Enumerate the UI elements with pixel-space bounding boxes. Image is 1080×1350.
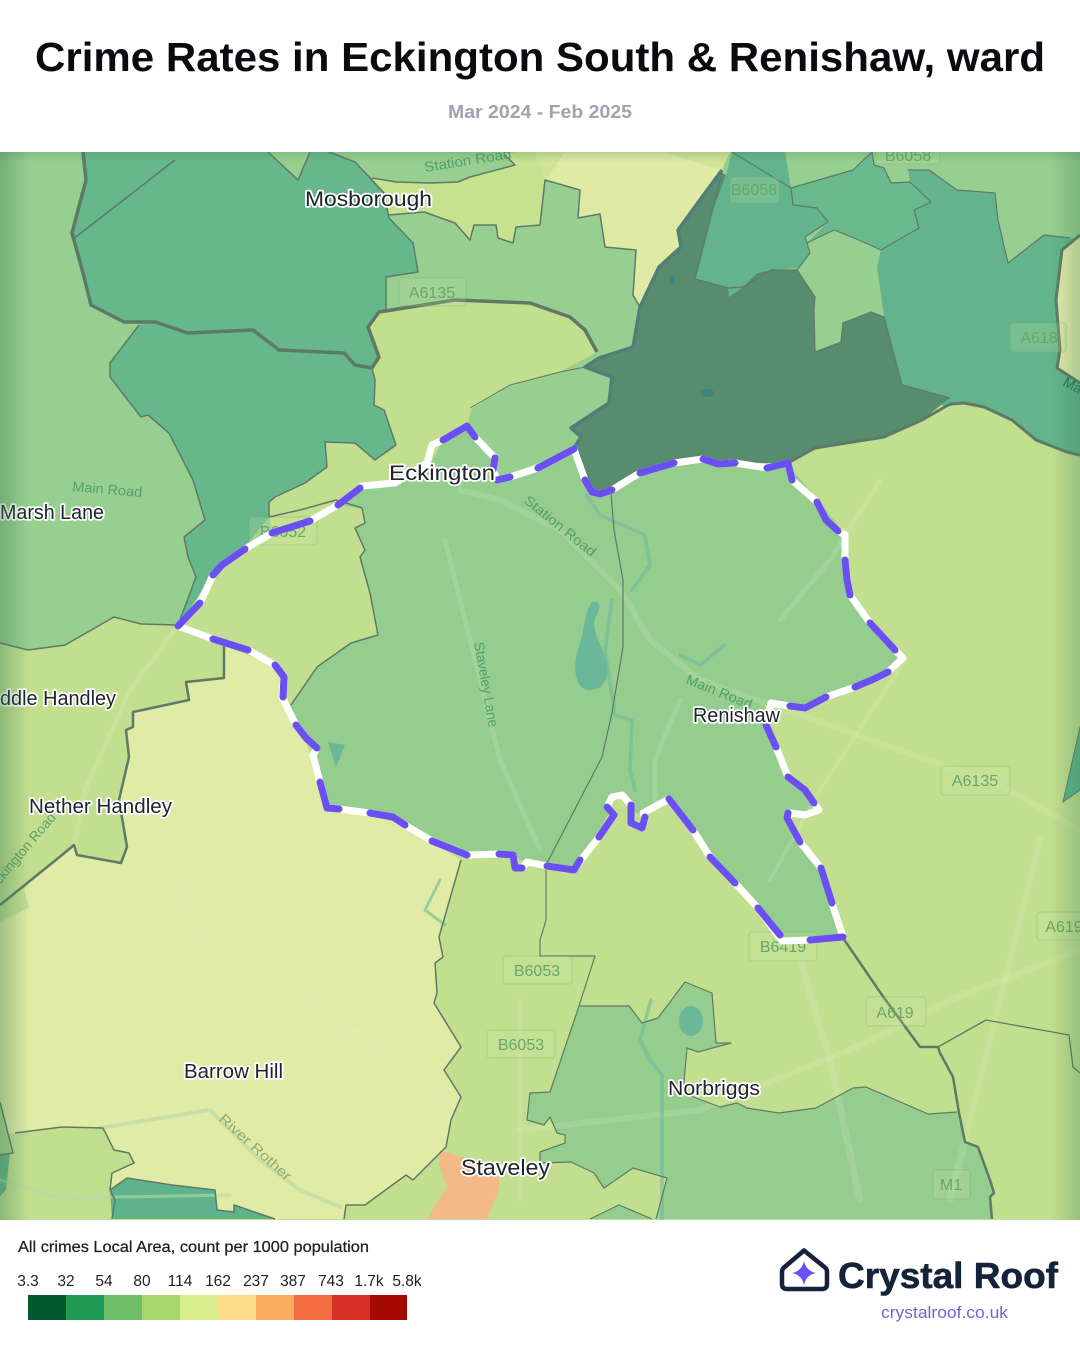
area: north pale yellow [545, 152, 722, 307]
road label: B6053 lower: B6053 [498, 1037, 544, 1054]
road name: Main Road west: Main Road [72, 478, 143, 500]
road label: B6058 top: B6058 [885, 148, 931, 165]
area: Norbriggs green [527, 982, 994, 1219]
legend values [17, 1273, 422, 1290]
area: dark green low crime [571, 173, 950, 495]
legend colour scale [28, 1295, 407, 1320]
road name: Station Road north: Station Road [423, 145, 512, 175]
area: east big green [877, 170, 1080, 455]
road label: M1: M1 [940, 1177, 962, 1194]
road name: Staveley Lane: Staveley Lane [471, 641, 502, 728]
road label: B6052: B6052 [260, 524, 306, 541]
subtitle: Mar 2024 - Feb 2025 [448, 101, 632, 122]
area: upper mid green [791, 152, 931, 250]
area: B6058 green [695, 152, 828, 297]
area: Mosborough green [72, 152, 418, 368]
area: top strip [665, 152, 730, 170]
area: north-west light green [0, 152, 730, 650]
road label: A6135 north: A6135 [409, 285, 455, 302]
legend [17, 1239, 422, 1320]
legend values: 1.7k [354, 1273, 384, 1290]
roads and rivers [0, 480, 1080, 1200]
place: Staveley: Staveley [461, 1155, 550, 1180]
title: Crime Rates in Eckington South & Renishaw, ward [35, 34, 1045, 80]
area: small south green [590, 1205, 652, 1219]
logo [782, 1250, 1059, 1322]
road label: B6419: B6419 [760, 939, 806, 956]
legend values: 162 [205, 1273, 231, 1290]
legend values: 387 [280, 1273, 306, 1290]
logo wordmark: Crystal Roof [838, 1255, 1059, 1296]
road label: A619 south: A619 [876, 1005, 914, 1022]
area: north-east light green [730, 152, 1080, 316]
road label: A619 south [866, 997, 926, 1026]
road label: A6135 east [941, 766, 1010, 795]
road label: A618: A618 [1020, 330, 1058, 347]
area: south green block [110, 1178, 275, 1219]
road name: Main Road Renishaw: Main Road [684, 671, 755, 712]
river name: River Rother: River Rother [216, 1110, 295, 1184]
place: Barrow Hill: Barrow Hill [184, 1061, 283, 1083]
ward outline white [178, 426, 903, 941]
road shields [249, 140, 1080, 1199]
area: west edge green [0, 1153, 10, 1196]
website: crystalroof.co.uk [881, 1304, 1009, 1322]
area: central light pocket [815, 268, 884, 351]
road label: A619 east [1037, 912, 1080, 940]
place: Mosborough: Mosborough [305, 188, 432, 211]
choropleth map [0, 140, 1080, 1220]
road label: A6135 east: A6135 [952, 773, 998, 790]
road label: B6058 upper [730, 177, 779, 203]
place: Norbriggs: Norbriggs [668, 1078, 760, 1100]
legend values: 32 [57, 1273, 75, 1290]
legend values: 743 [318, 1273, 344, 1290]
area: ward lime pocket [178, 505, 378, 705]
road label: M1 [933, 1170, 970, 1199]
area: Mosborough top lime [372, 152, 545, 243]
road label: A618 [1010, 323, 1066, 352]
ward boundary [178, 426, 903, 941]
ponds [328, 275, 714, 1036]
water features [0, 495, 725, 1219]
place: Eckington: Eckington [389, 462, 495, 485]
road label: B6053 upper: B6053 [514, 963, 560, 980]
place: Nether Handley: Nether Handley [29, 796, 172, 818]
ward outline purple dashes [178, 426, 895, 940]
area: Marsh Lane side green [110, 322, 396, 626]
area: north of Eckington green [468, 398, 561, 476]
area: south-west pale yellow [0, 646, 461, 1219]
area: pale east edge [1056, 235, 1080, 383]
place: Middle Handley clipped: ddle Handley [0, 688, 116, 710]
legend values: 114 [168, 1273, 193, 1290]
area: ward fill [288, 454, 898, 938]
place: Renishaw: Renishaw [693, 705, 781, 727]
area: west edge lime [0, 1106, 12, 1154]
road label: B6053 lower [487, 1030, 555, 1058]
road label: B6052 [249, 517, 317, 545]
place: Marsh Lane: Marsh Lane [0, 502, 104, 524]
road name: Station Road ward: Station Road [521, 492, 600, 560]
district boundaries [0, 152, 1080, 1219]
legend title: All crimes Local Area, count per 1000 population [18, 1239, 369, 1256]
area: far east green sliver [1063, 727, 1080, 802]
area: south-west lime blob [0, 1127, 134, 1219]
road label: B6053 upper [503, 956, 572, 984]
road label: B6058 top [876, 152, 940, 164]
icon: house with star [782, 1250, 827, 1289]
road label: B6419 [749, 932, 817, 961]
legend values: 237 [243, 1273, 269, 1290]
road label: B6058 upper: B6058 [731, 182, 777, 199]
area: Eckington lime [269, 300, 597, 530]
area: top centre lime patch [535, 152, 565, 180]
map edge shading [0, 152, 1080, 1220]
legend values: 3.3 [17, 1273, 39, 1290]
legend values: 80 [133, 1273, 151, 1290]
area: Staveley orange [427, 1150, 500, 1219]
legend values: 5.8k [392, 1273, 422, 1290]
road label: A6135 north [399, 278, 466, 306]
legend values: 54 [95, 1273, 113, 1290]
